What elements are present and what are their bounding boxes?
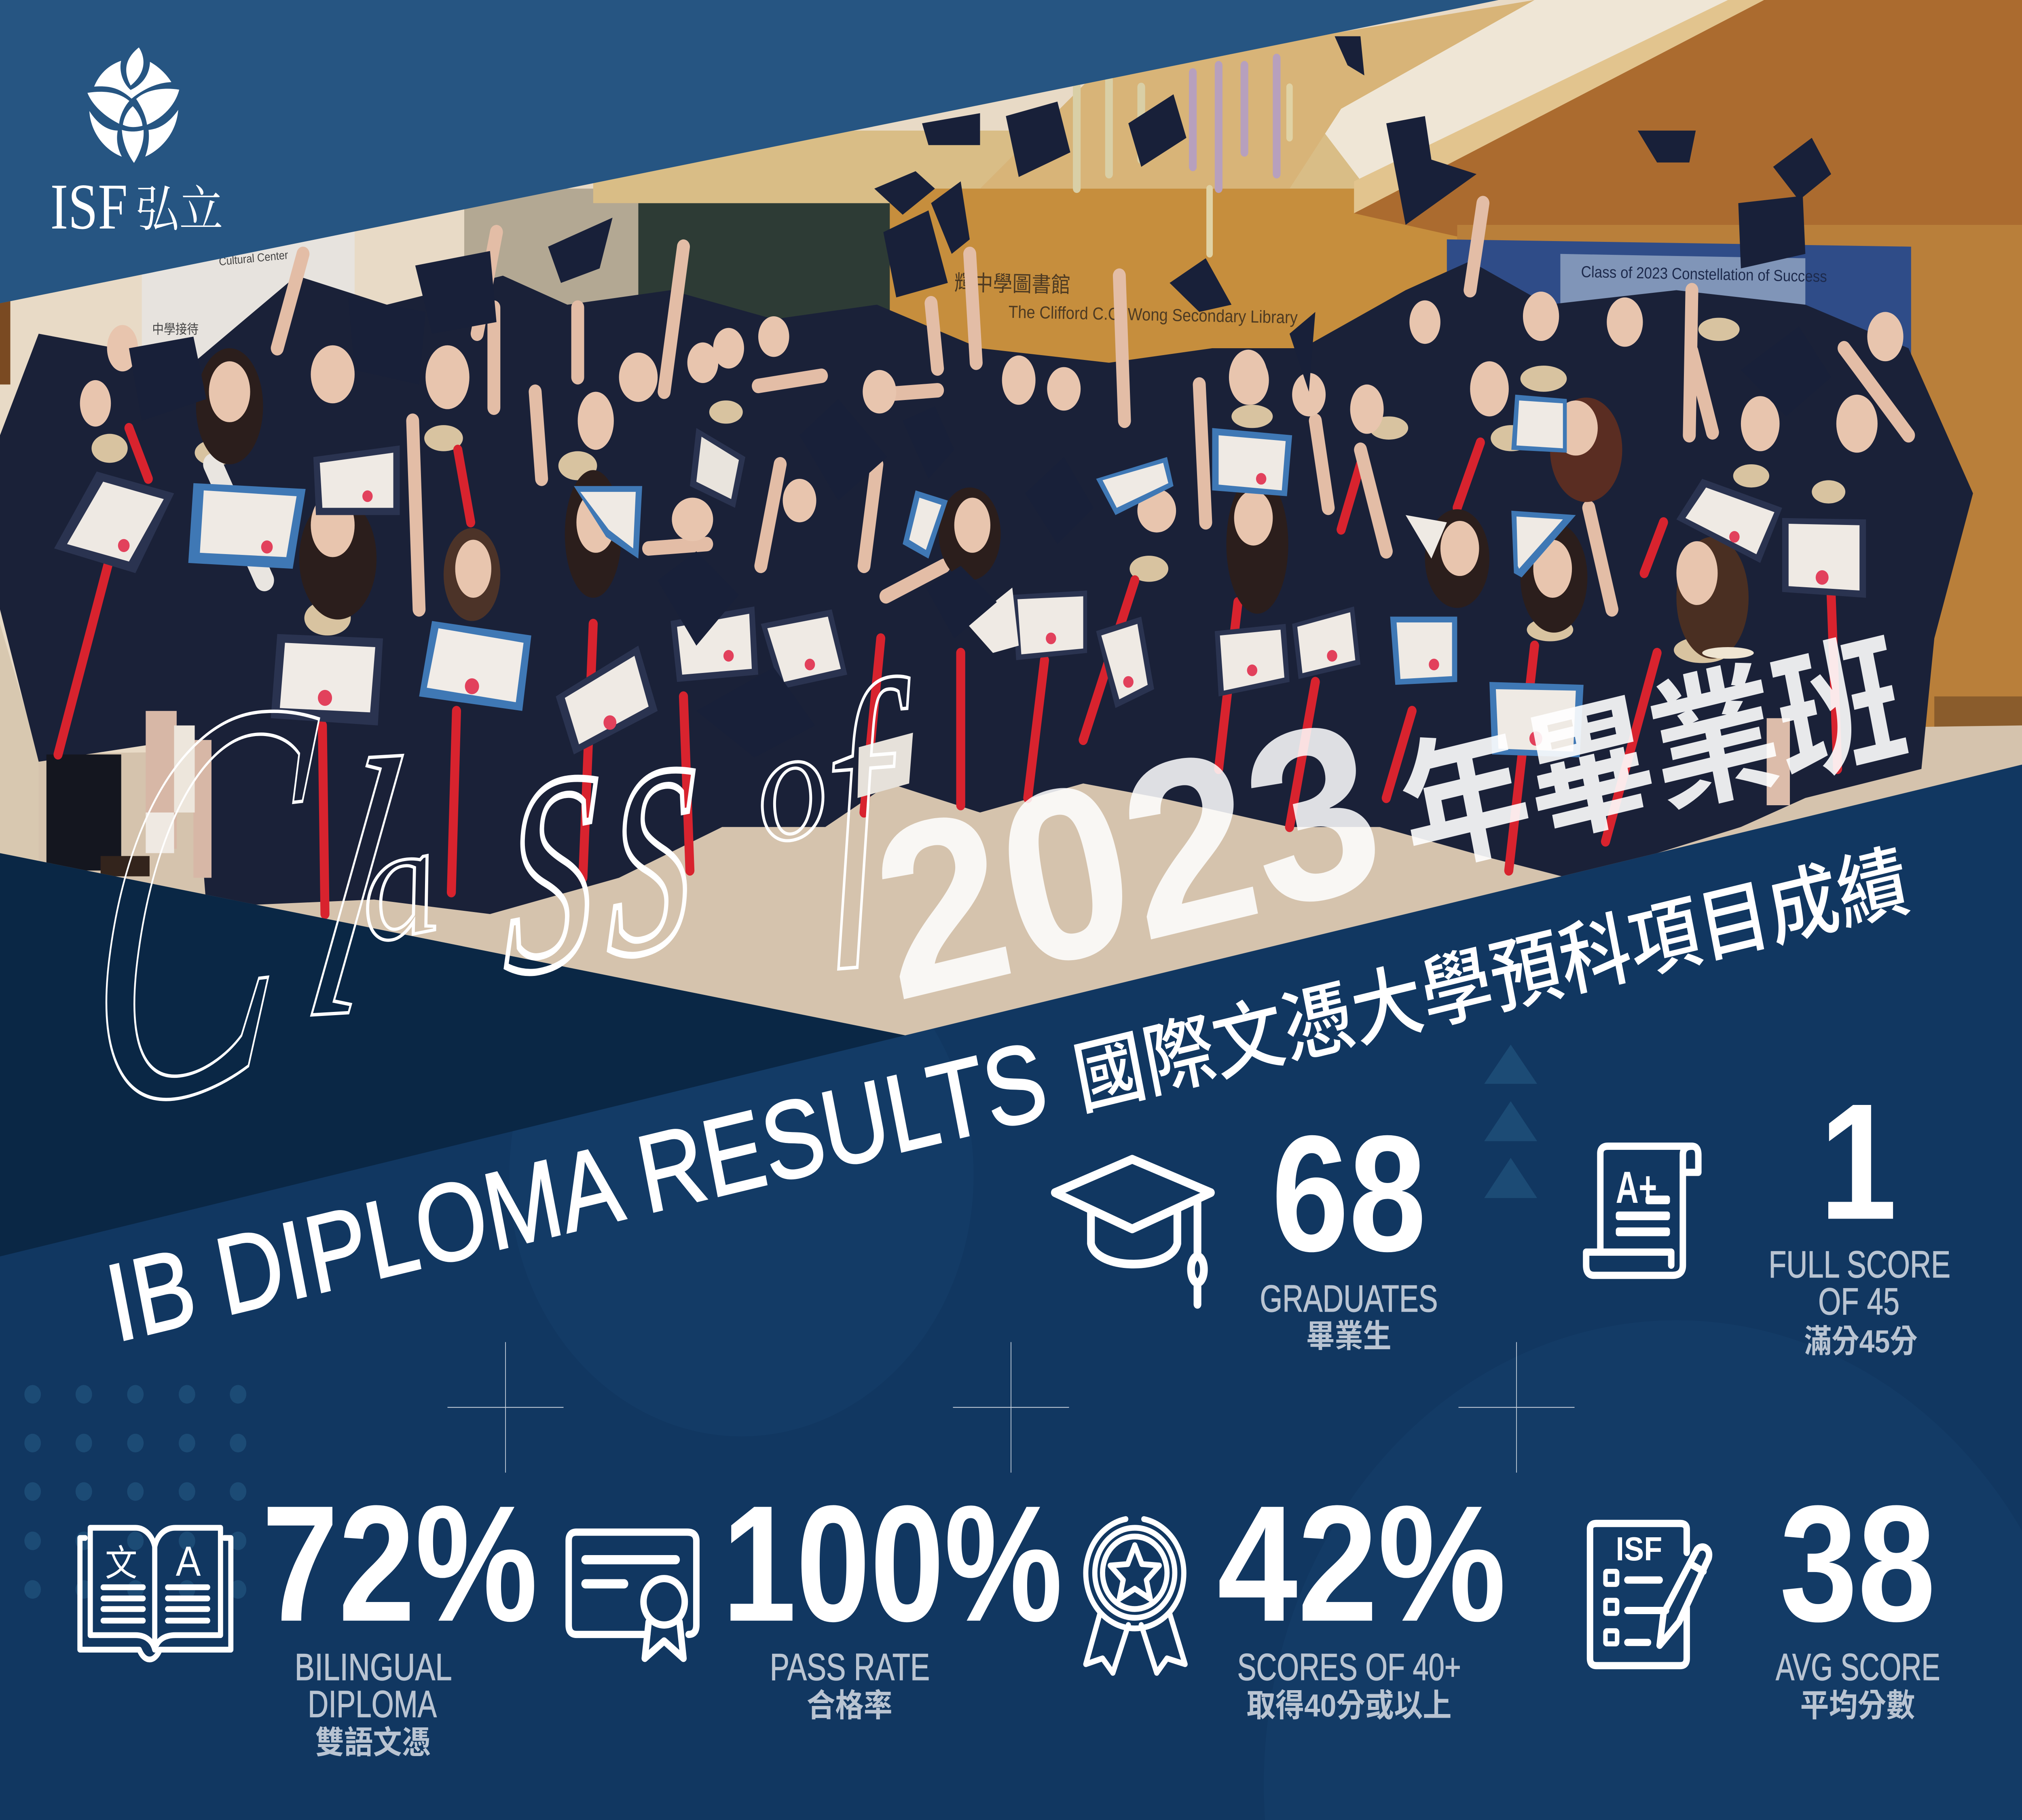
label Chinese: 滿分45分 xyxy=(1804,1323,1918,1359)
script title: Class of: s xyxy=(604,607,705,1039)
crosshair dividers xyxy=(448,1342,1574,1473)
hair xyxy=(196,348,1749,659)
logo: ISF lotus and wordmark xyxy=(50,47,223,243)
label Chinese: 平均分數 xyxy=(1800,1687,1915,1723)
diploma certificates xyxy=(54,395,1866,798)
icon: open book: 文 xyxy=(105,1543,137,1583)
label: AVG SCORE xyxy=(1776,1646,1940,1688)
raised arms xyxy=(213,203,1908,609)
label second line: OF 45 xyxy=(1818,1280,1899,1323)
label Chinese: 畢業生 xyxy=(1306,1318,1392,1354)
value: 42% xyxy=(1217,1471,1506,1656)
label: PASS RATE xyxy=(770,1646,930,1688)
legs and shoes xyxy=(47,711,1790,878)
value: 1 xyxy=(1819,1069,1897,1254)
photo sign and backdrop lettering: The Clifford C.C. Wong Secondary Library xyxy=(1008,302,1298,327)
graduate faces xyxy=(80,292,1904,659)
script title: Class of: o xyxy=(741,690,839,878)
icon: open book: A xyxy=(176,1538,201,1585)
wordmark: ISF xyxy=(50,171,128,243)
certificate red seals xyxy=(118,473,1829,746)
stat: 100% pass rate xyxy=(569,1471,1063,1723)
panel: graduation photo xyxy=(0,0,2022,1045)
script title: Class of xyxy=(59,574,930,1229)
lower results panel xyxy=(0,765,2022,1820)
stat: 68 graduates xyxy=(1055,1101,1438,1354)
flying graduation caps xyxy=(129,36,1831,758)
icon: open book xyxy=(80,1528,231,1659)
wordmark xyxy=(50,171,223,243)
stat: 38 average score xyxy=(1590,1471,1940,1723)
heading: IB Diploma Results: IB DIPLOMA RESULTS xyxy=(97,1018,1056,1365)
heading: IB Diploma Results: 國際文憑大學預科項目成績 xyxy=(1067,836,1916,1125)
decorative circles xyxy=(510,914,2022,1820)
heading: IB Diploma Results xyxy=(97,810,1917,1365)
value: 38 xyxy=(1780,1471,1935,1656)
icon: ISF lotus mark xyxy=(87,47,179,163)
script title: Class of: a xyxy=(346,788,450,977)
top banner xyxy=(0,0,1498,303)
value: 72% xyxy=(262,1471,538,1656)
decorative dot grid xyxy=(24,1385,246,1599)
script title: Class of: f xyxy=(814,617,930,971)
wordmark: 弘立 xyxy=(135,182,223,237)
red gown stoles xyxy=(58,428,1838,914)
photo background: venue walls, ceiling and floor xyxy=(0,0,2022,1045)
icon: A+ scroll xyxy=(1586,1146,1698,1275)
label: BILINGUAL xyxy=(295,1646,452,1688)
label Chinese: 合格率 xyxy=(807,1687,893,1723)
icon: ISF checklist and pencil xyxy=(1590,1524,1709,1666)
photo sign and backdrop lettering: 輝中學圖書館 xyxy=(954,271,1070,297)
icon: ISF checklist and pencil: ISF xyxy=(1616,1530,1662,1568)
icon: certificate with ribbon xyxy=(569,1532,696,1658)
value: 68 xyxy=(1271,1101,1426,1286)
photo sign and backdrop lettering: Class of 2023 Constellation of Success xyxy=(1581,262,1827,286)
script title: Class of: s xyxy=(500,608,609,1060)
stat: 1 full score xyxy=(1586,1069,1950,1359)
photo sign and backdrop lettering: 中學接待 xyxy=(152,322,199,336)
icon: A+ scroll: A+ xyxy=(1616,1163,1657,1213)
label: SCORES OF 40+ xyxy=(1237,1646,1461,1688)
label: GRADUATES xyxy=(1260,1277,1438,1320)
label: FULL SCORE xyxy=(1768,1243,1950,1286)
crowd of graduates in dark gowns xyxy=(0,261,1973,914)
label Chinese: 雙語文憑 xyxy=(315,1724,431,1760)
value: 100% xyxy=(722,1471,1063,1656)
photo sign and backdrop lettering xyxy=(152,248,1827,336)
icon: graduation cap xyxy=(1055,1159,1211,1304)
script title: Class of: C xyxy=(59,574,341,1229)
heading: graduating class in Chinese: 年畢業班 xyxy=(1388,617,1917,895)
lower-left dark panel xyxy=(0,853,905,1257)
script title: Class of: l xyxy=(286,682,421,1096)
heading: 2023: 2023 xyxy=(855,666,1400,1052)
photo sign and backdrop lettering: Cultural Center xyxy=(218,248,288,268)
label second line: DIPLOMA xyxy=(308,1683,437,1725)
stat: 72% bilingual diploma xyxy=(80,1471,538,1760)
decorative triangles xyxy=(1484,1045,1537,1198)
label Chinese: 取得40分或以上 xyxy=(1247,1687,1452,1723)
hanging flowers xyxy=(1077,58,1290,254)
stat: 42% scores of 40+ xyxy=(1086,1471,1506,1723)
icon: medal with star xyxy=(1086,1519,1185,1673)
gold graduation hoods xyxy=(91,318,1845,663)
